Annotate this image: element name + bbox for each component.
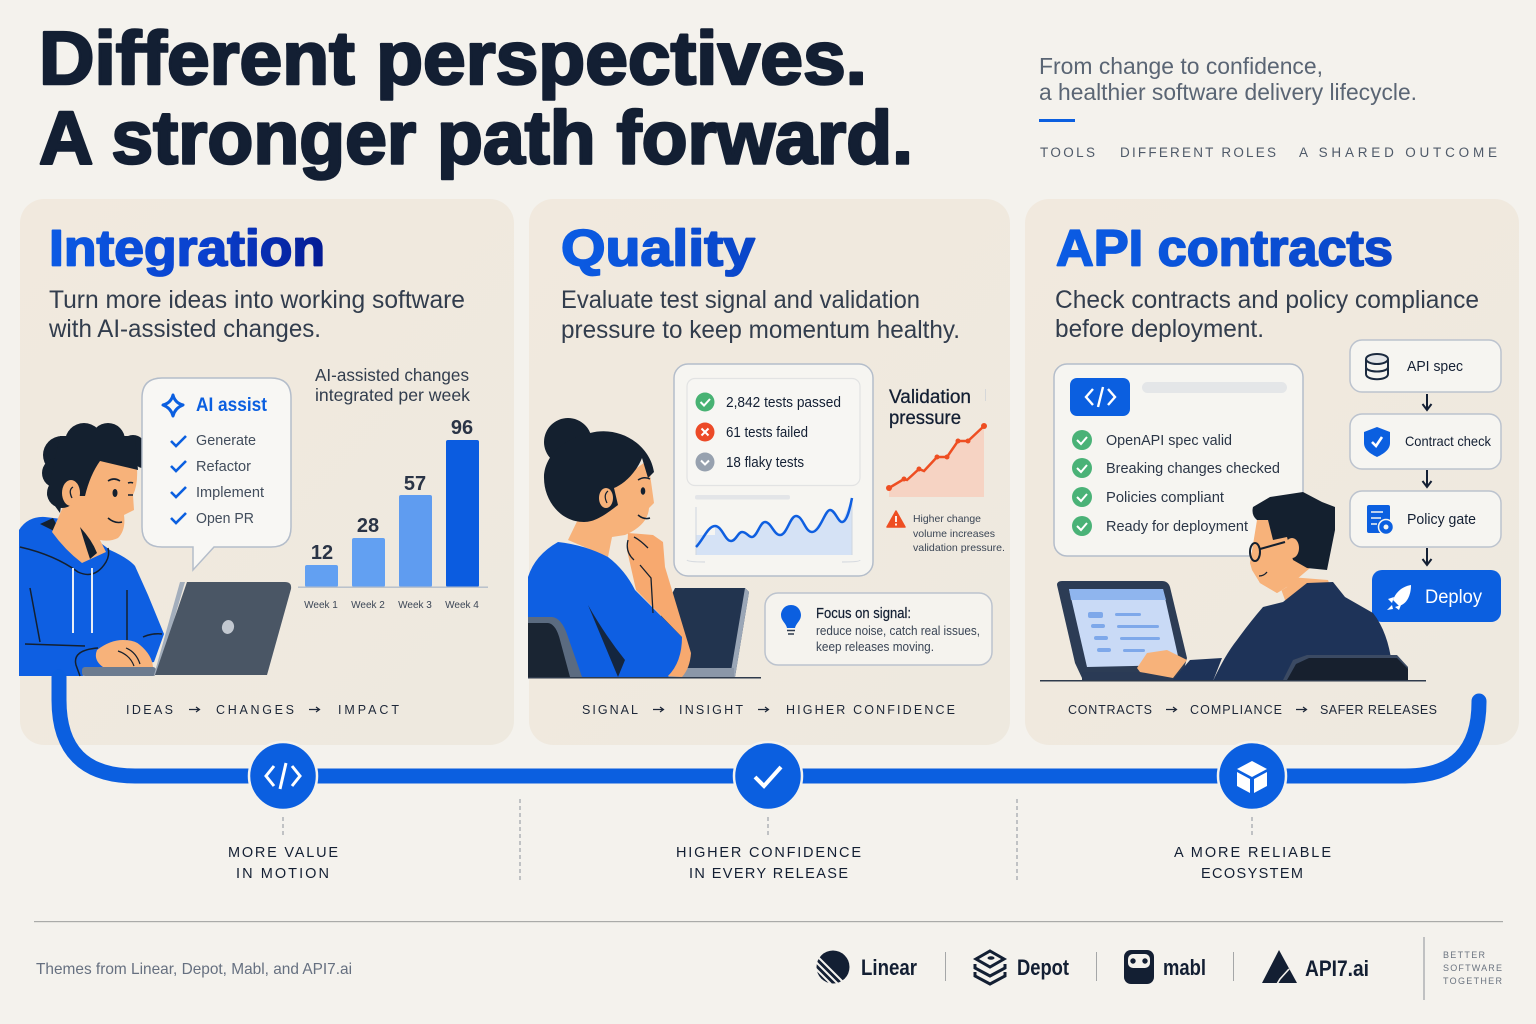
checklist rows: Policies compliant bbox=[1106, 490, 1224, 506]
logo: linear: Linear bbox=[861, 955, 917, 980]
quality description bbox=[561, 286, 960, 344]
checklist rows: Breaking changes checked bbox=[1106, 461, 1280, 477]
logo: linear bbox=[815, 950, 917, 984]
bar chart: changes per week: Week 1 bbox=[304, 600, 338, 611]
header keywords: DIFFERENT ROLES bbox=[1120, 145, 1276, 160]
bar chart: changes per week bbox=[298, 417, 488, 611]
flow label: contracts to safer releases: COMPLIANCE bbox=[1190, 703, 1282, 717]
footer tagline: TOGETHER bbox=[1443, 976, 1502, 986]
step: api spec bbox=[1350, 340, 1501, 392]
focus on signal callout: reduce noise, catch real issues, bbox=[816, 624, 980, 638]
arrow bbox=[1422, 470, 1432, 487]
outcome label: reliable ecosystem: A MORE RELIABLE bbox=[1174, 845, 1331, 861]
outcome label: higher confidence bbox=[676, 845, 861, 882]
openapi checklist card bbox=[1054, 364, 1303, 556]
outcome label: more value: MORE VALUE bbox=[228, 845, 338, 861]
chart title bbox=[315, 365, 470, 405]
footer tagline: SOFTWARE bbox=[1443, 963, 1502, 973]
outcome label: more value: IN MOTION bbox=[236, 866, 329, 882]
illustration: developer with hoodie and laptop bbox=[19, 423, 291, 676]
checklist: Implement bbox=[196, 485, 264, 501]
ai assist heading: AI assist bbox=[196, 395, 268, 416]
bar chart: changes per week: 57 bbox=[404, 473, 426, 495]
flow label: ideas to impact: CHANGES bbox=[216, 703, 294, 717]
focus on signal callout: keep releases moving. bbox=[816, 640, 934, 654]
warning note: volume increases bbox=[913, 528, 995, 540]
checklist: Open PR bbox=[196, 511, 254, 527]
test status rows: 18 flaky tests bbox=[726, 455, 804, 471]
header keywords: A SHARED OUTCOME bbox=[1299, 145, 1497, 160]
flow label: contracts to safer releases bbox=[1068, 703, 1437, 717]
header keywords: TOOLS bbox=[1040, 145, 1095, 160]
flow label: ideas to impact: IMPACT bbox=[338, 703, 399, 717]
step: policy gate bbox=[1350, 491, 1501, 547]
logo: api7.ai bbox=[1262, 950, 1369, 984]
ai assist speech bubble bbox=[142, 378, 291, 570]
integration description: Turn more ideas into working software bbox=[49, 286, 465, 314]
checklist rows bbox=[1072, 430, 1280, 536]
panel: integration bbox=[19, 199, 514, 745]
timeline node: higher confidence bbox=[734, 742, 802, 810]
icon: database bbox=[1366, 354, 1388, 379]
progress path connector bbox=[59, 677, 1479, 776]
title: A stronger path forward. bbox=[39, 96, 913, 180]
icon: policy document bbox=[1367, 505, 1394, 534]
logo: api7.ai: API7.ai bbox=[1305, 956, 1369, 981]
title bbox=[39, 16, 913, 180]
step: contract check bbox=[1350, 414, 1501, 469]
integration description: with AI-assisted changes. bbox=[48, 315, 321, 343]
flow label: signal to confidence bbox=[582, 703, 955, 717]
arrow bbox=[1422, 548, 1432, 565]
outcome label: reliable ecosystem: ECOSYSTEM bbox=[1201, 866, 1303, 882]
bar chart: changes per week: Week 2 bbox=[351, 600, 385, 611]
flow label: ideas to impact: IDEAS bbox=[126, 703, 173, 717]
test status rows: 61 tests failed bbox=[726, 425, 808, 441]
outcome label: higher confidence: IN EVERY RELEASE bbox=[689, 866, 848, 882]
step: deploy button: Deploy bbox=[1425, 587, 1482, 608]
icon: sparkle bbox=[163, 395, 183, 416]
panel: quality bbox=[528, 199, 1010, 745]
test results card bbox=[674, 364, 873, 576]
icon: shield bbox=[1364, 427, 1390, 457]
outcome label: higher confidence: HIGHER CONFIDENCE bbox=[676, 845, 861, 861]
flow label: ideas to impact bbox=[126, 703, 399, 717]
illustration: woman thinking at laptop bbox=[528, 418, 761, 678]
step: policy gate: Policy gate bbox=[1407, 512, 1476, 528]
footer tagline: BETTER bbox=[1443, 950, 1486, 960]
focus on signal callout: Focus on signal: bbox=[816, 606, 911, 622]
integration description bbox=[48, 286, 465, 343]
logo: mabl: mabl bbox=[1163, 955, 1206, 980]
icon: light bulb bbox=[781, 605, 801, 634]
outcome label: more value bbox=[228, 845, 338, 882]
checklist bbox=[171, 433, 264, 527]
checklist: Generate bbox=[196, 433, 256, 449]
checklist rows: Ready for deployment bbox=[1106, 519, 1248, 535]
heading: quality: Quality bbox=[561, 220, 756, 276]
header tagline: From change to confidence, bbox=[1039, 53, 1323, 79]
checklist rows: OpenAPI spec valid bbox=[1106, 433, 1232, 449]
icon: rocket bbox=[1387, 585, 1411, 610]
icon: warning triangle bbox=[887, 511, 905, 527]
checklist: Refactor bbox=[196, 459, 251, 475]
arrow bbox=[1422, 394, 1432, 410]
heading: api contracts: API contracts bbox=[1056, 220, 1393, 276]
illustration: engineer with glasses and laptop bbox=[1040, 492, 1426, 682]
line chart: test signal bbox=[687, 495, 860, 562]
footer tagline bbox=[1443, 950, 1502, 986]
flow label: contracts to safer releases: CONTRACTS bbox=[1068, 703, 1152, 717]
chart title: integrated per week bbox=[315, 385, 470, 405]
bar chart: changes per week: Week 4 bbox=[445, 600, 479, 611]
step: contract check: Contract check bbox=[1405, 433, 1492, 449]
validation pressure heading: Validation bbox=[889, 386, 971, 408]
logo: depot bbox=[975, 951, 1070, 984]
bar chart: changes per week: 96 bbox=[451, 417, 473, 439]
validation pressure heading: pressure bbox=[889, 407, 961, 429]
quality description: pressure to keep momentum healthy. bbox=[561, 316, 960, 344]
area chart: validation pressure bbox=[886, 389, 987, 497]
timeline node: more value bbox=[249, 742, 317, 810]
warning note: validation pressure. bbox=[913, 542, 1005, 554]
header tagline bbox=[1039, 53, 1417, 122]
flow label: signal to confidence: INSIGHT bbox=[679, 703, 743, 717]
flow label: signal to confidence: SIGNAL bbox=[582, 703, 638, 717]
outcome label: reliable ecosystem bbox=[1174, 845, 1331, 882]
icon: code badge bbox=[1070, 378, 1130, 416]
heading: integration: Integration bbox=[49, 220, 325, 276]
header tagline: a healthier software delivery lifecycle. bbox=[1039, 79, 1417, 105]
header keywords bbox=[1040, 145, 1497, 160]
step: deploy button bbox=[1372, 570, 1501, 622]
flow label: contracts to safer releases: SAFER RELEASES bbox=[1320, 703, 1437, 717]
api contracts description: before deployment. bbox=[1055, 315, 1264, 343]
flow label: signal to confidence: HIGHER CONFIDENCE bbox=[786, 703, 955, 717]
warning note bbox=[887, 511, 1005, 554]
bar chart: changes per week: Week 3 bbox=[398, 600, 432, 611]
footer source note: Themes from Linear, Depot, Mabl, and API7.ai bbox=[36, 961, 352, 978]
validation pressure heading bbox=[889, 386, 971, 429]
focus on signal callout bbox=[765, 593, 992, 665]
bar chart: changes per week: 28 bbox=[357, 515, 379, 537]
warning note: Higher change bbox=[913, 513, 981, 525]
step: api spec: API spec bbox=[1407, 359, 1463, 375]
bar chart: changes per week: 12 bbox=[311, 542, 333, 564]
logo: depot: Depot bbox=[1017, 955, 1070, 980]
test status rows bbox=[696, 392, 841, 472]
test status rows: 2,842 tests passed bbox=[726, 395, 841, 411]
title: Different perspectives. bbox=[39, 16, 867, 100]
logo: mabl bbox=[1124, 950, 1206, 984]
timeline node: reliable ecosystem bbox=[1218, 742, 1286, 810]
api contracts description bbox=[1055, 286, 1479, 343]
quality description: Evaluate test signal and validation bbox=[561, 286, 920, 314]
api contracts description: Check contracts and policy compliance bbox=[1055, 286, 1479, 314]
panel: api contracts bbox=[1025, 199, 1519, 745]
chart title: AI-assisted changes bbox=[315, 365, 469, 385]
